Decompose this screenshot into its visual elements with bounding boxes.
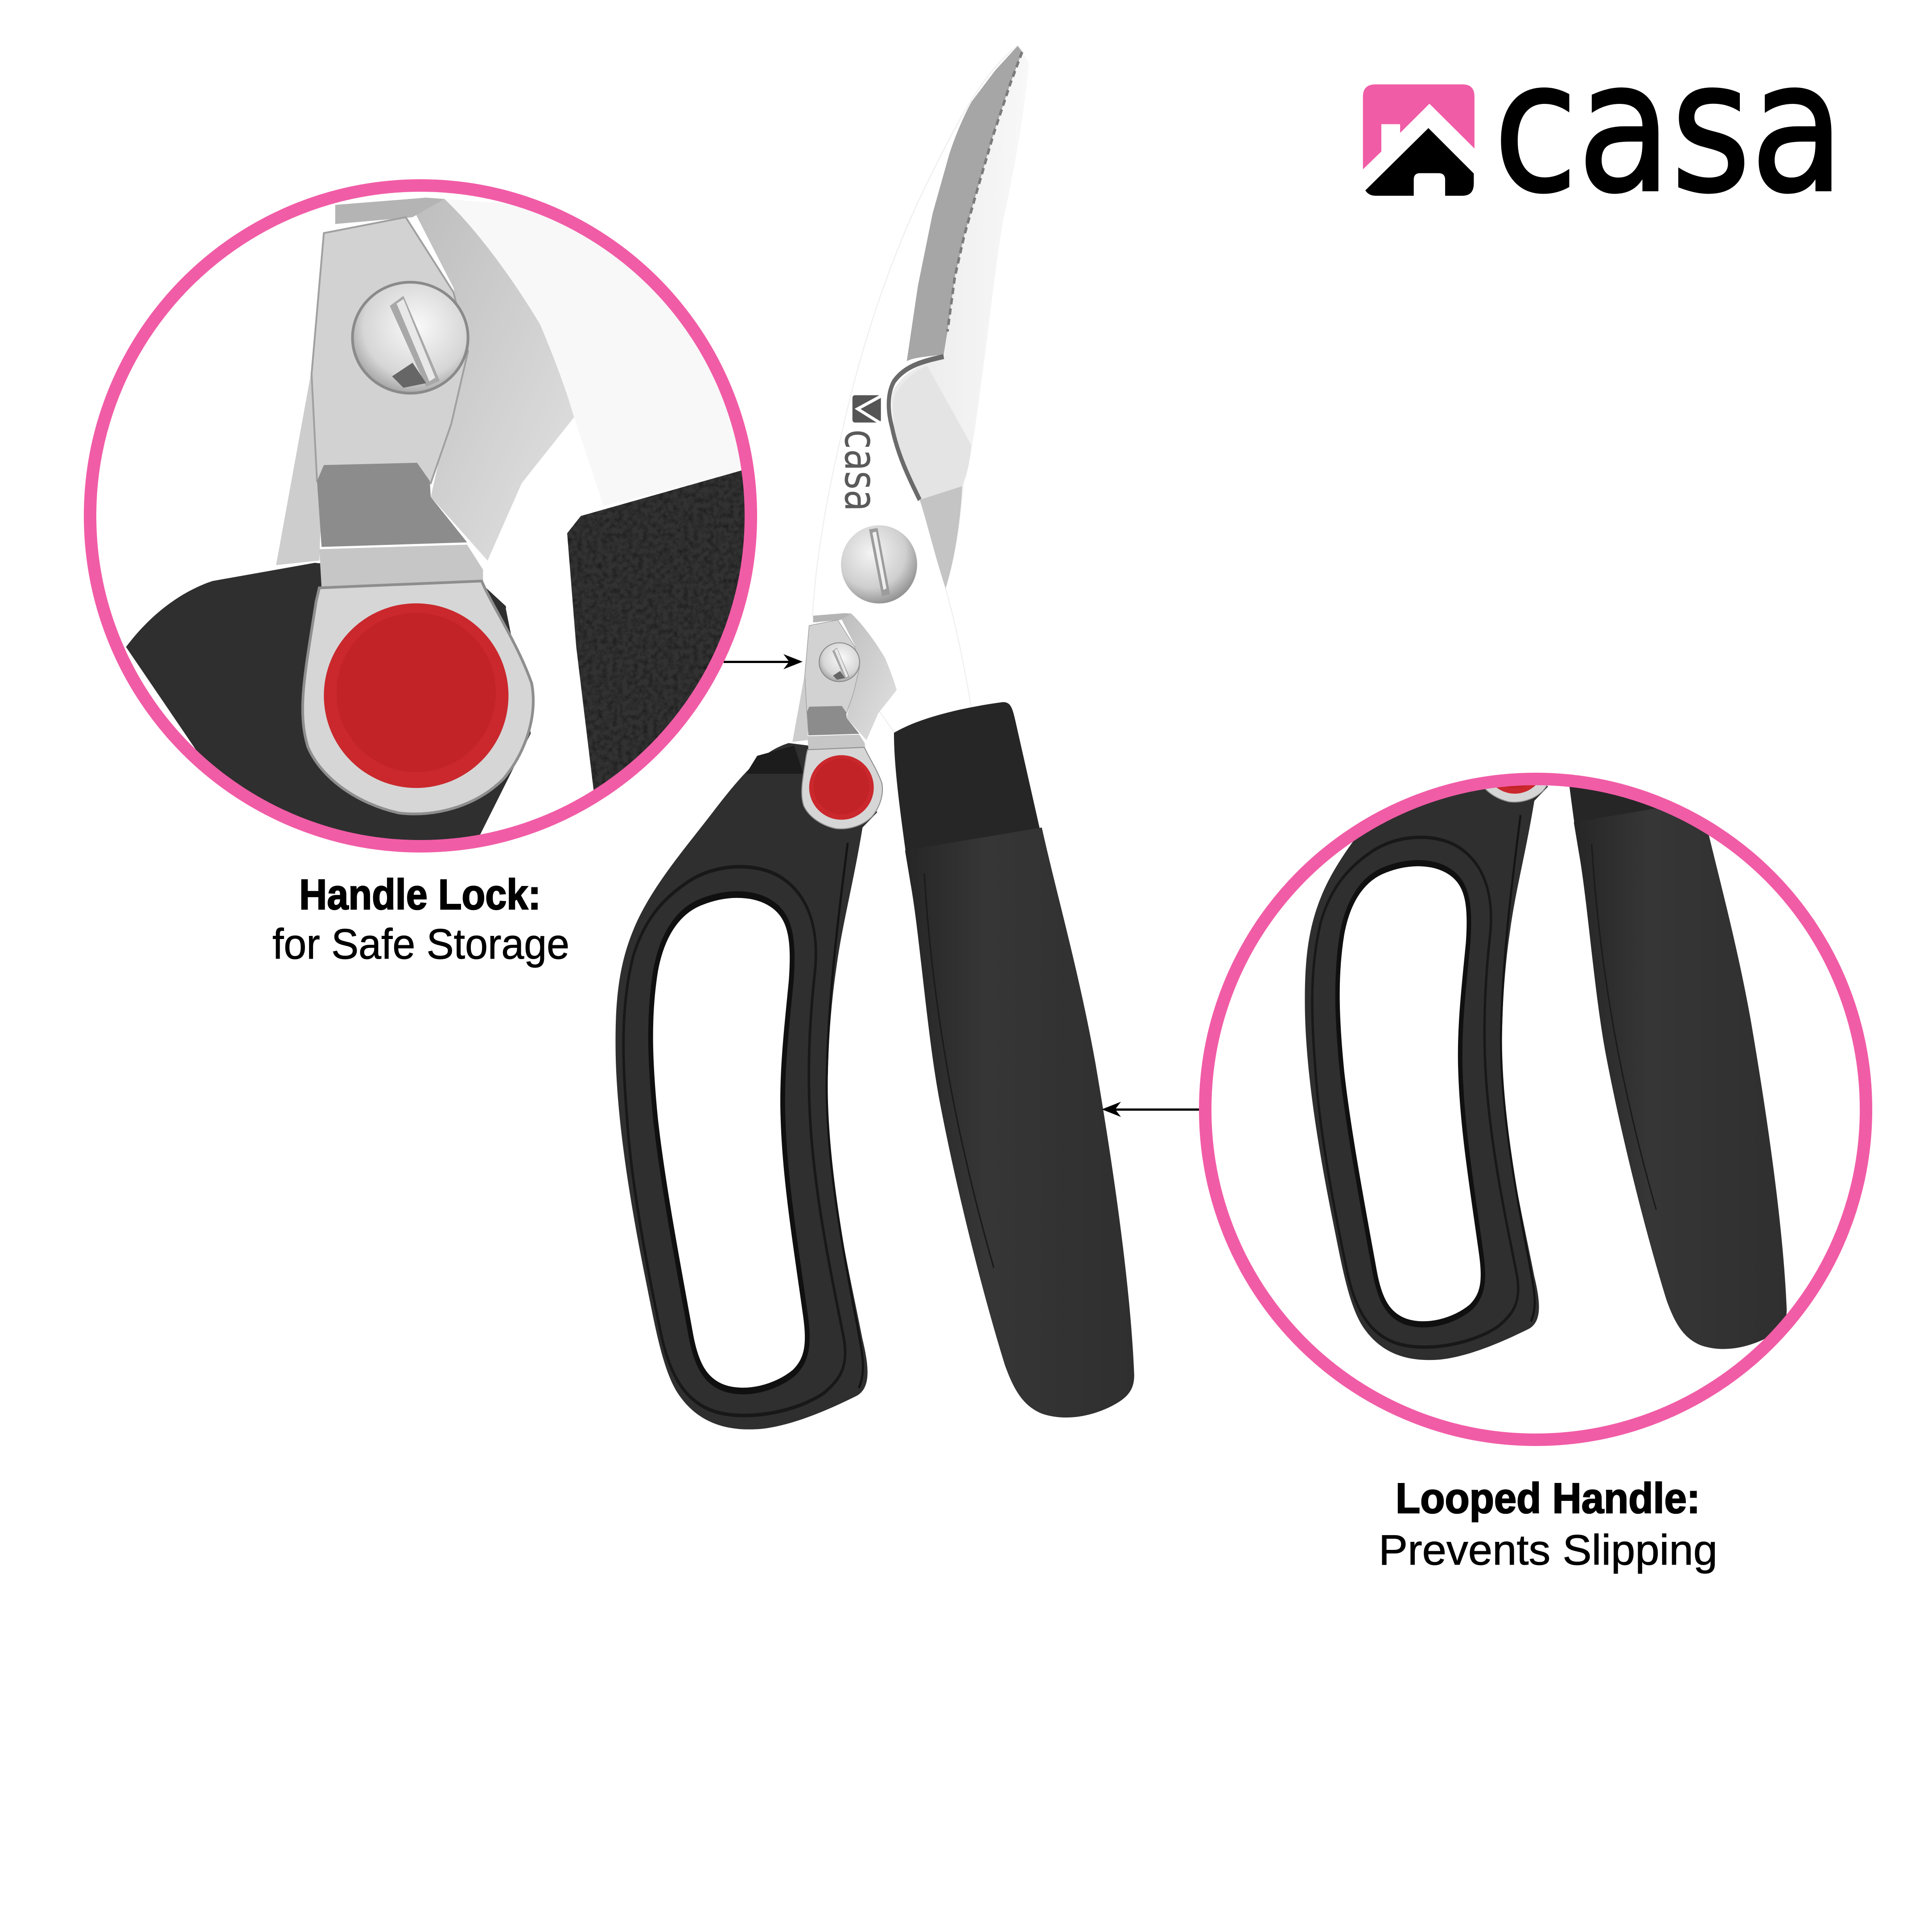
white upper blade xyxy=(445,199,749,506)
rivet xyxy=(841,525,917,604)
blades xyxy=(812,46,1029,732)
red button xyxy=(809,755,874,820)
logo icon: pink roof and black house xyxy=(1363,84,1475,196)
pink ring xyxy=(1205,779,1866,1440)
caption: looped handle: Prevents Slipping xyxy=(1379,1526,1718,1574)
lock mechanism small xyxy=(792,613,897,829)
arrow: lock callout xyxy=(724,654,803,669)
caption: looped handle xyxy=(1379,1475,1718,1574)
magnified lock view xyxy=(126,198,758,852)
lock artwork xyxy=(792,613,897,829)
handles and lock xyxy=(615,613,1134,1429)
plate body xyxy=(805,620,860,713)
logo: casa xyxy=(1363,22,1844,233)
magnified handles view xyxy=(1305,601,1787,1360)
arrow: handle callout xyxy=(1102,1102,1199,1117)
plate top strip xyxy=(813,613,851,622)
straight upper handle xyxy=(894,702,1134,1417)
upper blade tang xyxy=(839,614,897,740)
panel: looped handle magnified circle xyxy=(1205,601,1866,1440)
scissors main product xyxy=(615,46,1134,1429)
infographic canvas xyxy=(84,45,1872,1574)
logo wordmark: casa xyxy=(1494,22,1844,233)
plate fold shadow xyxy=(807,706,859,735)
blade logo icon xyxy=(853,395,881,424)
blade engraved wordmark: casa xyxy=(835,429,887,511)
panel: handle lock magnified circle xyxy=(90,185,758,852)
plate ring xyxy=(802,747,882,829)
caption: looped handle: Looped Handle: xyxy=(1396,1475,1700,1522)
lower blade sliver xyxy=(792,672,809,742)
caption: handle lock: Handle Lock: xyxy=(299,871,541,919)
looped lower handle xyxy=(615,743,877,1429)
pink ring xyxy=(90,185,751,846)
caption: handle lock xyxy=(272,871,569,968)
lock screw xyxy=(819,643,860,682)
dark handle under the plate xyxy=(126,563,531,852)
white gap right of plate xyxy=(476,533,594,843)
textured grip collar xyxy=(567,470,758,797)
plate light band xyxy=(807,735,865,750)
caption: handle lock: for Safe Storage xyxy=(272,920,569,968)
